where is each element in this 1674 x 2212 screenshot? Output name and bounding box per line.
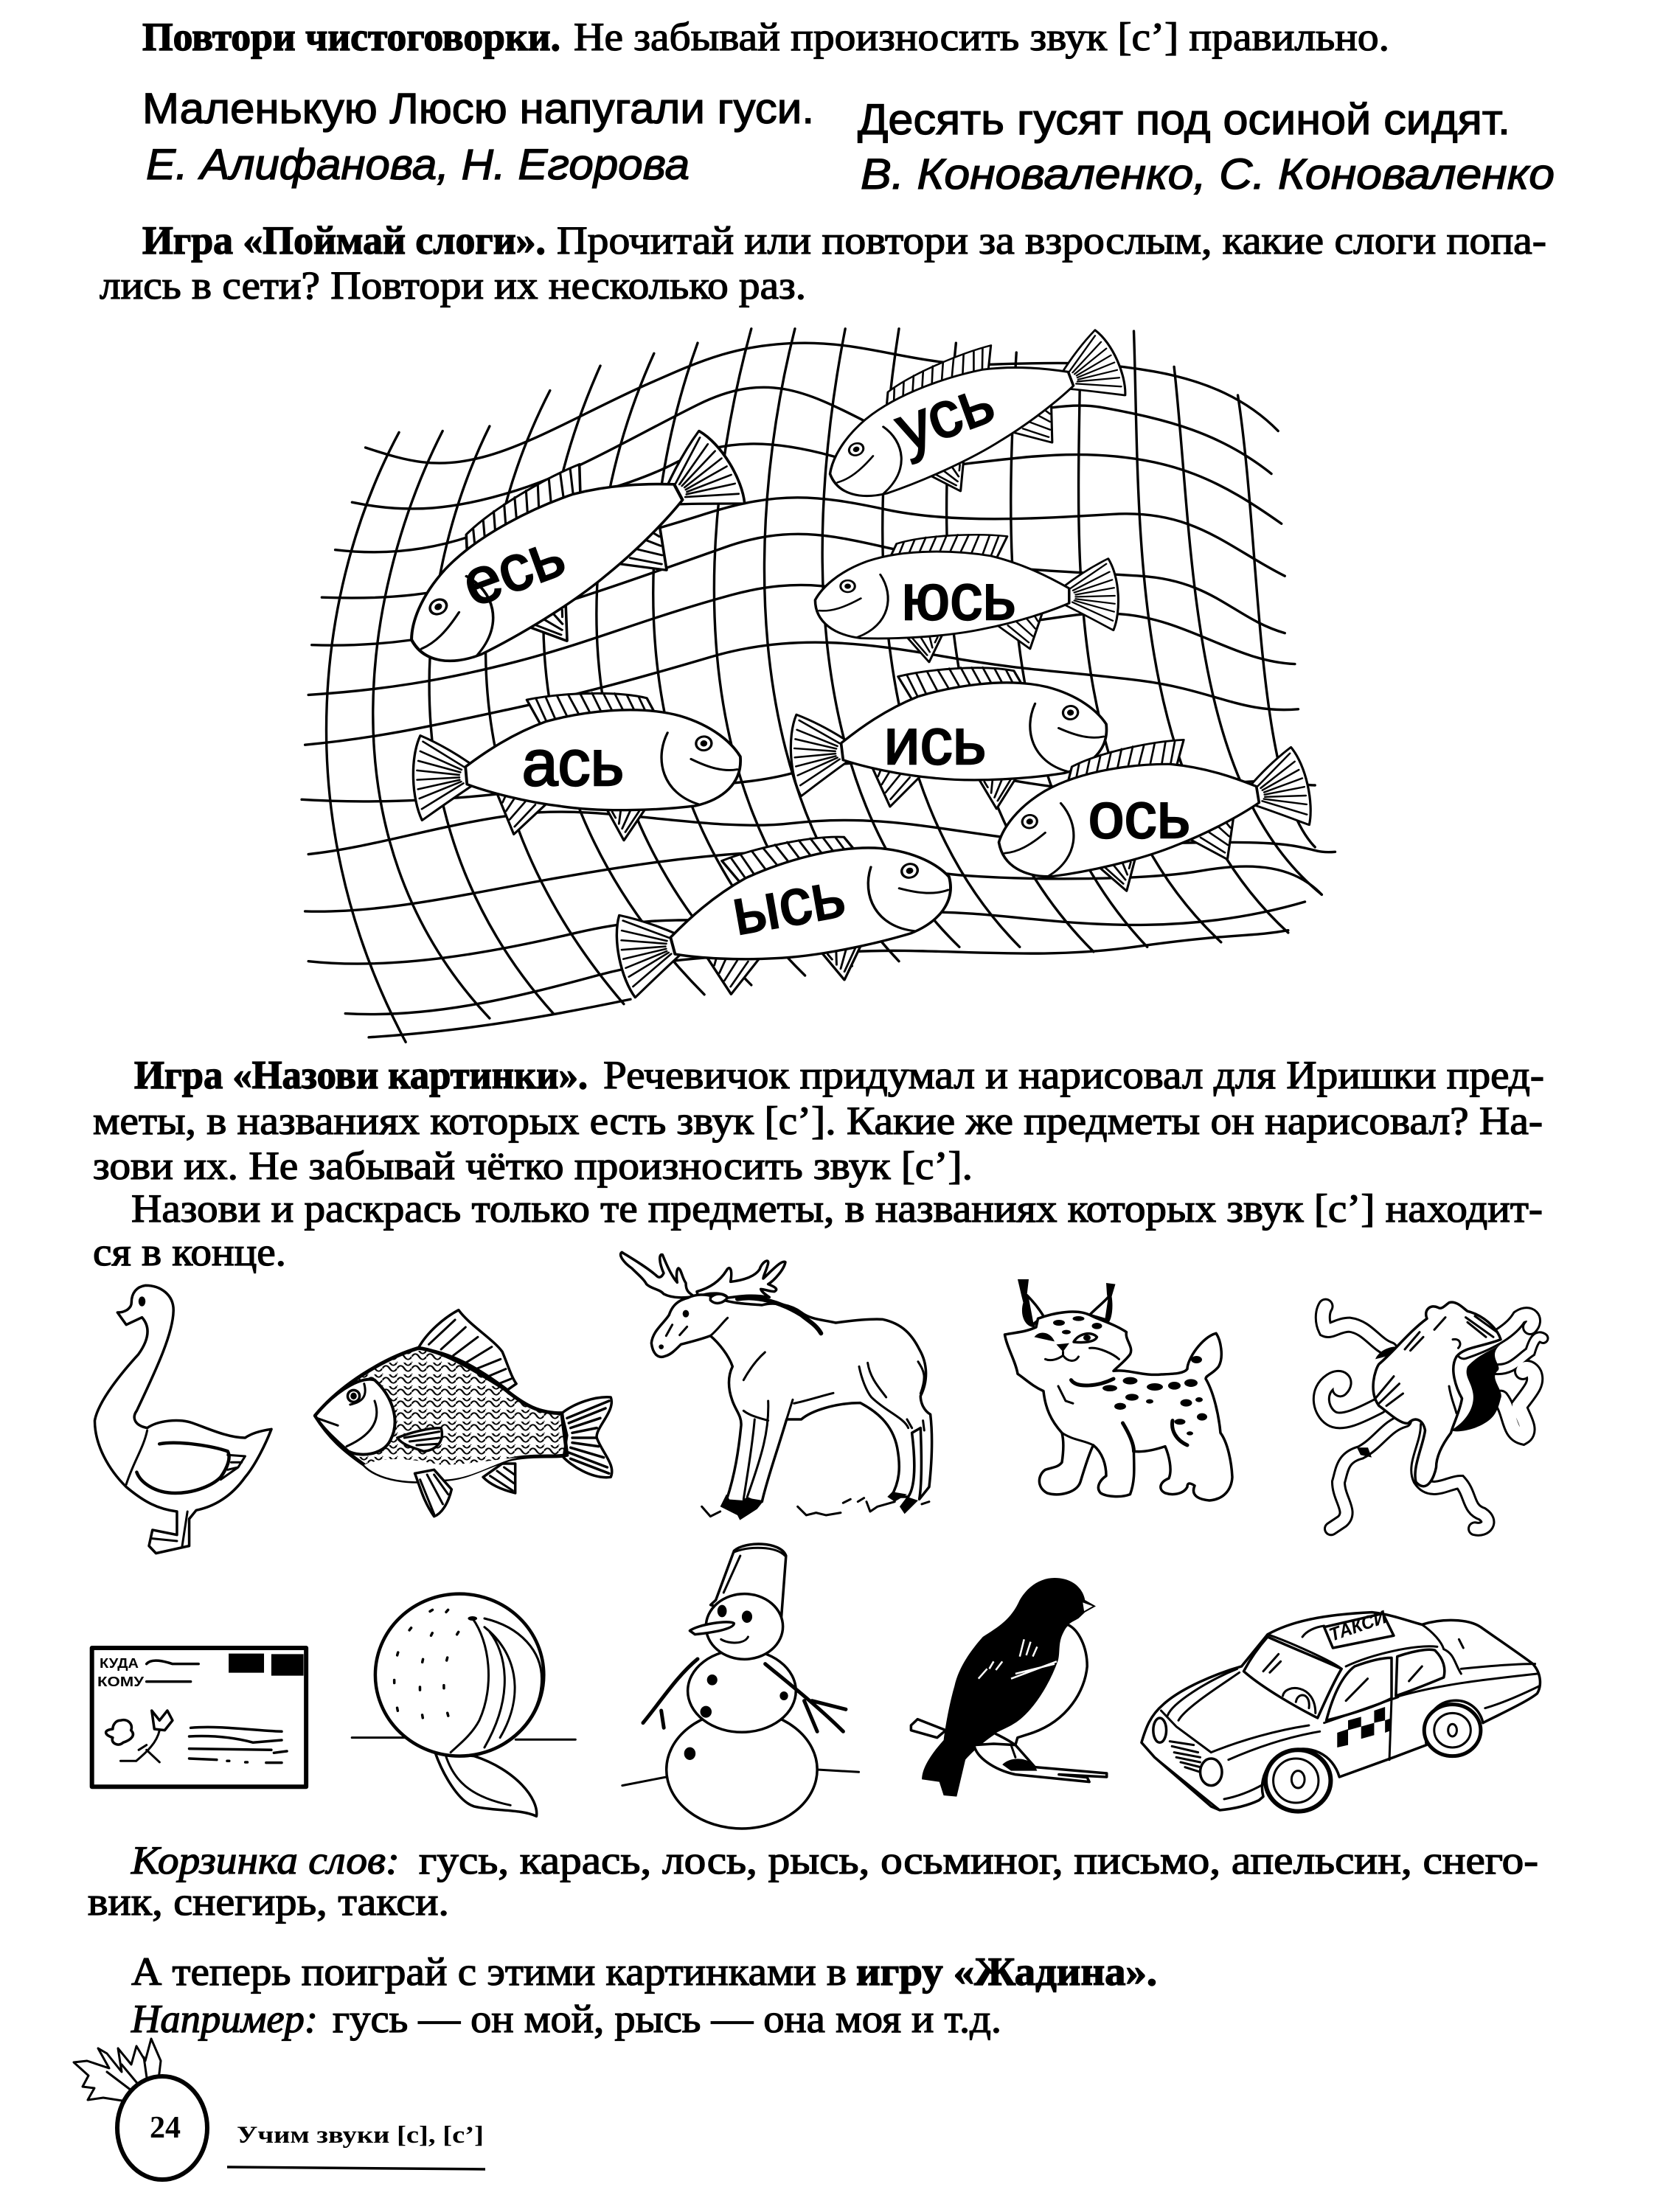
icon: moose (621, 1252, 932, 1520)
text block: word basket: гусь, карась, лось, рысь, осьминог, письмо, апельсин, снего- (419, 1838, 1538, 1882)
text block: game catch the syllables: Игра «Поймай слоги». (142, 218, 546, 262)
icon: bullfinch (911, 1578, 1107, 1797)
text block: greedy game (131, 1950, 1157, 2041)
label: recipient: КОМУ (97, 1674, 145, 1689)
fish: усь (807, 304, 1141, 532)
text block: greedy game: Например: (131, 1997, 318, 2041)
fish: ась (407, 680, 747, 858)
text block: tongue twister left (142, 85, 814, 189)
fish: есь: есь (453, 517, 574, 620)
text block: greedy game: гусь — он мой, рысь — она моя и т.д. (333, 1997, 1001, 2041)
footer: section title (227, 2122, 485, 2169)
fish: ась: ась (522, 726, 624, 799)
fish: ысь: ысь (726, 858, 850, 949)
icon: orange (352, 1594, 575, 1816)
page number: 24 (150, 2111, 181, 2145)
text block: game name the pictures: ся в конце. (93, 1230, 286, 1274)
icon: taxi car (1142, 1607, 1540, 1812)
text block: game catch the syllables: Прочитай или повтори за взрослым, какие слоги попа- (557, 218, 1546, 262)
text block: greedy game: А теперь поиграй с этими картинками в (131, 1950, 847, 1994)
icon: snowman (622, 1544, 859, 1829)
fish: ись (782, 650, 1115, 833)
icon: goose (94, 1285, 271, 1554)
text block: tongue twister right: В. Коноваленко, С. Коноваленко (861, 150, 1555, 198)
text block: game name the pictures: меты, в названиях которых есть звук [с’]. Какие же предметы он нарисовал? На- (93, 1099, 1543, 1143)
taxi roof sign: ТАКСИ (1327, 1607, 1390, 1646)
text block: game catch the syllables: лись в сети? Повтори их несколько раз. (100, 263, 806, 307)
text block: game catch the syllables (100, 218, 1546, 307)
icon: postal envelope (92, 1648, 306, 1787)
illustration: fishing net (302, 329, 1336, 1042)
text block: game name the pictures: Речевичок придумал и нарисовал для Иришки пред- (603, 1053, 1544, 1097)
heading: tongue twisters instruction: Повтори чистоговорки. (142, 15, 560, 59)
icon: octopus (1322, 1302, 1543, 1529)
text block: game name the pictures: зови их. Не забывай чётко произносить звук [с’]. (93, 1144, 973, 1188)
text block: greedy game: игру «Жадина». (856, 1950, 1157, 1994)
fish: ись: ись (883, 705, 987, 778)
label: address: КУДА (100, 1656, 139, 1671)
text block: word basket (88, 1838, 1538, 1924)
icon: lynx (1004, 1279, 1232, 1500)
fish: ось (987, 720, 1320, 911)
text block: game name the pictures: Назови и раскрась только те предметы, в названиях которых звук [с’] находит- (131, 1186, 1543, 1231)
text block: word basket: Корзинка слов: (131, 1838, 400, 1882)
fish: юсь: юсь (901, 560, 1016, 633)
text block: tongue twister left: Маленькую Люсю напугали гуси. (142, 85, 814, 133)
fish: ось: ось (1088, 779, 1190, 852)
icon: page number fruit badge (74, 2039, 207, 2180)
footer: section title: Учим звуки [с], [с’] (237, 2122, 484, 2149)
icon: carp fish (315, 1310, 612, 1517)
fish: есь (375, 400, 768, 705)
text block: tongue twister right: Десять гусят под осиной сидят. (858, 96, 1510, 144)
text block: game name the pictures: Игра «Назови картинки». (134, 1053, 588, 1097)
fish: ысь (601, 803, 968, 1034)
text block: tongue twister right (858, 96, 1555, 198)
text block: word basket: вик, снегирь, такси. (88, 1879, 449, 1924)
heading: tongue twisters instruction: Не забывай произносить звук [с’] правильно. (574, 15, 1389, 59)
fish: усь: усь (886, 364, 1003, 465)
text block: tongue twister left: Е. Алифанова, Н. Егорова (146, 141, 690, 189)
heading: tongue twisters instruction (142, 15, 1389, 59)
text block: game name the pictures (93, 1053, 1544, 1274)
fish: юсь (815, 535, 1118, 662)
